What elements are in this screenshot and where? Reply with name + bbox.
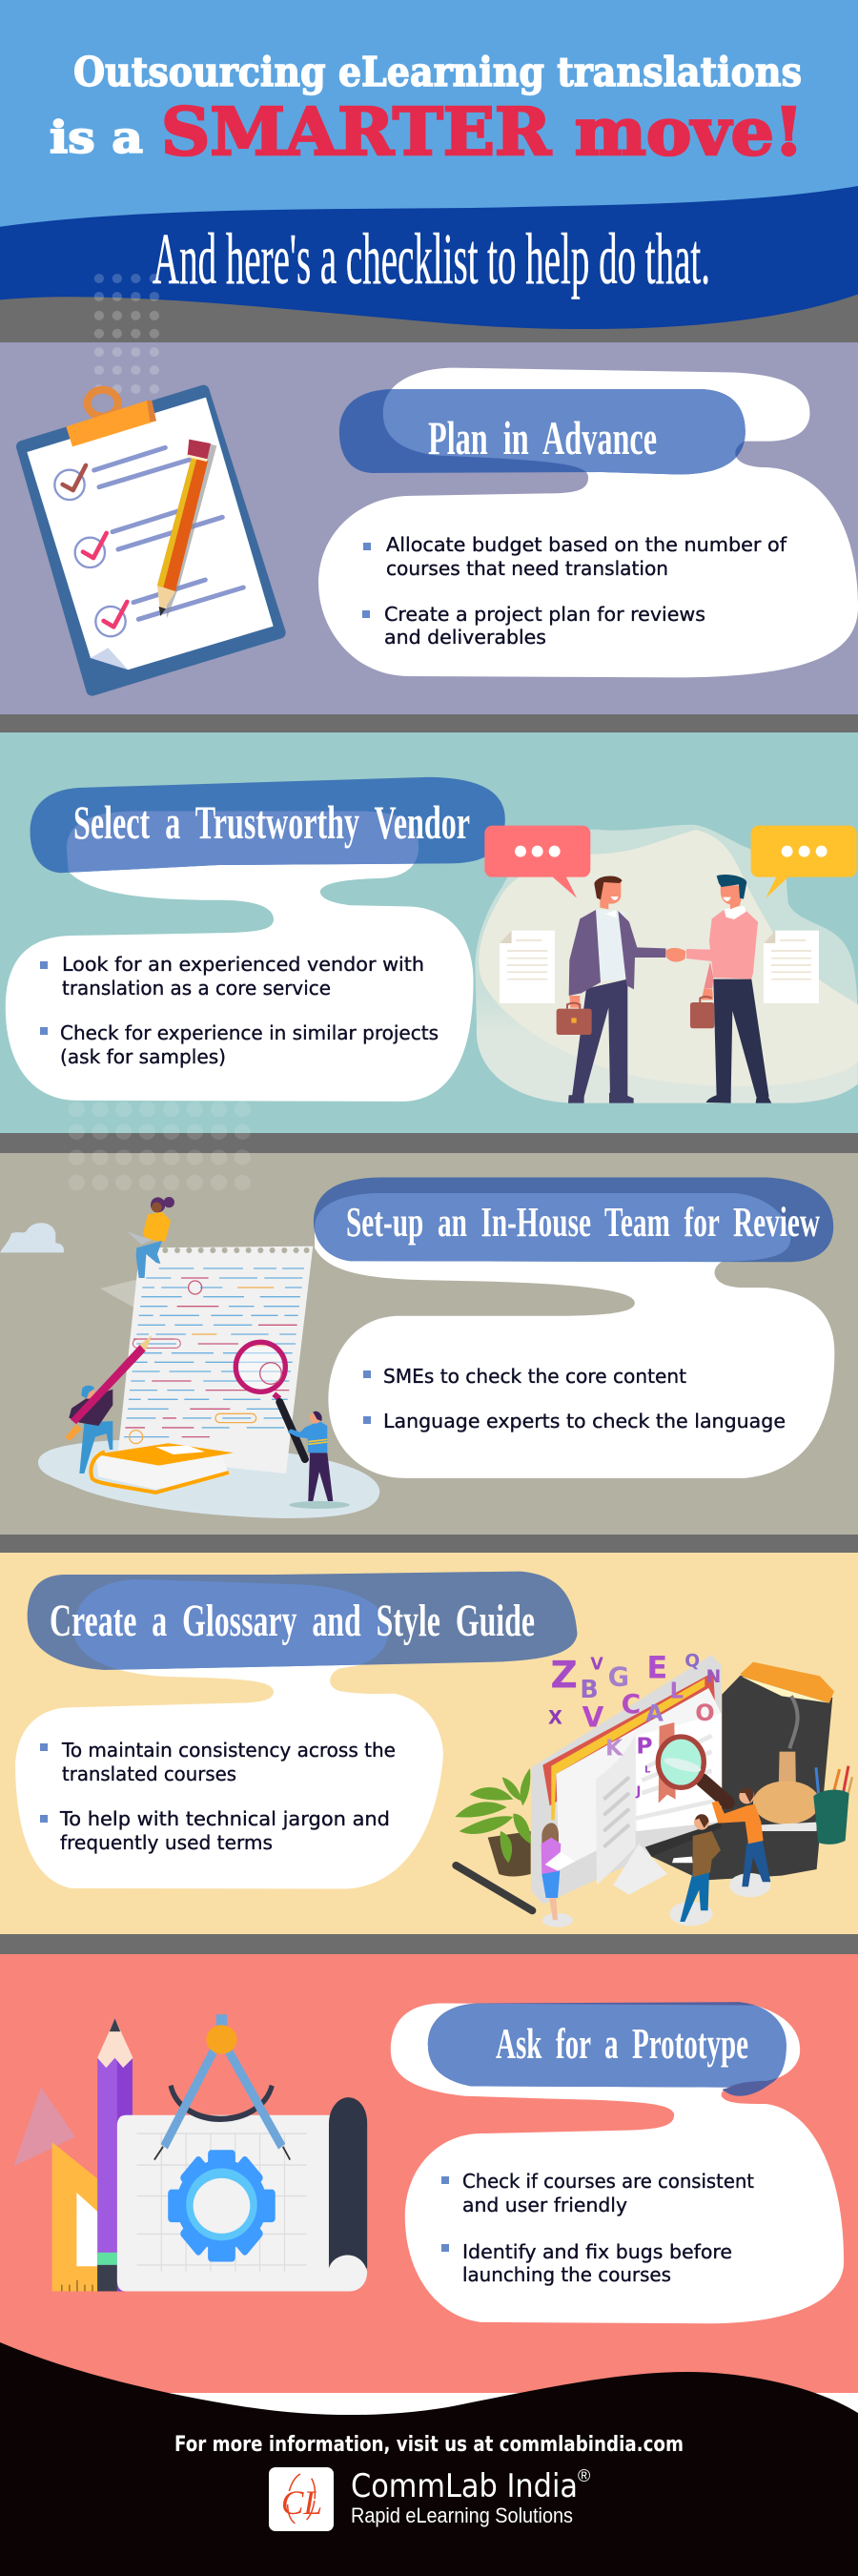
speech bubble yellow <box>751 826 857 898</box>
illustration: blueprint, pencil, compass, gear <box>13 2014 367 2291</box>
man left <box>557 876 665 1103</box>
bullets: translated courses <box>62 1762 236 1785</box>
reader woman <box>541 1823 575 1927</box>
bullets: Language experts to check the language <box>383 1410 786 1432</box>
floating letters: P <box>636 1732 652 1759</box>
illustration: handshake <box>475 825 858 1103</box>
bullets: and deliverables <box>384 626 546 649</box>
floating letters <box>548 1649 721 1800</box>
bullets: courses that need translation <box>386 557 668 580</box>
floating letters: J <box>635 1785 641 1800</box>
reader man orange <box>712 1788 770 1897</box>
documents <box>500 931 819 1003</box>
bullets: Look for an experienced vendor with <box>62 953 424 976</box>
footer text: For more information, visit us at commlabindia.com <box>174 2433 684 2457</box>
section backgrounds <box>0 342 858 2393</box>
footer <box>0 2342 858 2576</box>
white blob and heading pill <box>6 777 505 1190</box>
icon: clipboard with pencil <box>22 390 279 690</box>
floating letters: B <box>580 1675 599 1703</box>
person with magnifier <box>288 1412 333 1501</box>
bullets: Check if courses are consistent <box>462 2170 754 2193</box>
bullets <box>40 953 439 1068</box>
footer wave <box>0 2342 858 2576</box>
white blob and heading pill <box>318 368 858 677</box>
bullets: translation as a core service <box>62 977 331 999</box>
illustration: review team and document <box>0 1197 379 1518</box>
panel: select vendor <box>6 777 858 1190</box>
floating letters: Q <box>684 1651 700 1671</box>
illustration: book, monitor and readers <box>455 1649 852 1927</box>
logo: CommLab India <box>351 2467 578 2505</box>
floating letters: L <box>670 1680 684 1704</box>
logo <box>269 2466 590 2531</box>
bullets: To help with technical jargon and <box>59 1807 390 1830</box>
floating letters: A <box>645 1700 664 1727</box>
bullets: To maintain consistency across the <box>61 1739 396 1762</box>
bullets: frequently used terms <box>60 1831 273 1854</box>
floating letters: N <box>706 1667 721 1687</box>
title: Outsourcing eLearning translations <box>73 49 802 95</box>
bullets: SMEs to check the core content <box>383 1365 686 1388</box>
floating letters: Z <box>550 1654 578 1697</box>
lamp and dark backdrop <box>651 1662 852 1881</box>
panel: prototype <box>13 2002 844 2323</box>
floating letters: V <box>590 1656 603 1675</box>
person with pencil <box>65 1335 152 1473</box>
logo: Rapid eLearning Solutions <box>351 2504 573 2527</box>
compass <box>154 2014 290 2160</box>
panel: plan in advance <box>22 368 858 690</box>
magnifier <box>235 1342 305 1459</box>
bullets: Allocate budget based on the number of <box>386 533 787 556</box>
white blob and heading pill <box>314 1177 834 1478</box>
monitor <box>531 1655 722 1905</box>
bullets: Identify and fix bugs before <box>462 2240 732 2263</box>
floating letters: V <box>582 1701 604 1734</box>
logo: ® <box>578 2466 590 2485</box>
heading: Plan in Advance <box>428 411 657 464</box>
man right <box>665 875 771 1103</box>
floating letters: X <box>548 1706 562 1728</box>
floating letters: K <box>605 1735 623 1762</box>
bullets: launching the courses <box>462 2263 671 2286</box>
reader man brown vest <box>669 1814 721 1926</box>
panel: in-house team <box>0 1177 834 1518</box>
floating letters: L <box>644 1765 651 1776</box>
title: is a <box>50 112 143 163</box>
white blob and heading pill <box>15 1572 578 1889</box>
book <box>91 1443 234 1493</box>
magnifier <box>658 1737 727 1803</box>
bullets: Check for experience in similar projects <box>60 1021 439 1044</box>
logo: CL <box>281 2483 322 2522</box>
floating letters: G <box>608 1662 629 1692</box>
speech bubble red <box>484 826 590 898</box>
plant <box>455 1768 531 1876</box>
gear <box>168 2150 276 2261</box>
woman with laptop <box>127 1197 174 1278</box>
heading: Create a Glossary and Style Guide <box>50 1596 535 1646</box>
bullets <box>441 2170 754 2286</box>
floating letters: C <box>622 1688 641 1720</box>
floating letters: O <box>695 1700 715 1726</box>
bullets: Create a project plan for reviews <box>384 603 705 626</box>
bullets <box>40 1739 396 1854</box>
panel: glossary <box>15 1572 852 1927</box>
header background <box>0 0 858 346</box>
white blob and heading pill <box>391 2002 844 2323</box>
heading: Select a Trustworthy Vendor <box>73 795 470 849</box>
pen <box>456 1865 532 1910</box>
bullets <box>363 1365 786 1432</box>
title <box>50 49 804 171</box>
title: SMARTER move! <box>161 94 804 171</box>
bullets: (ask for samples) <box>60 1045 226 1068</box>
bullets: and user friendly <box>462 2194 627 2216</box>
floating letters: E <box>646 1649 667 1685</box>
bullets <box>362 533 787 649</box>
